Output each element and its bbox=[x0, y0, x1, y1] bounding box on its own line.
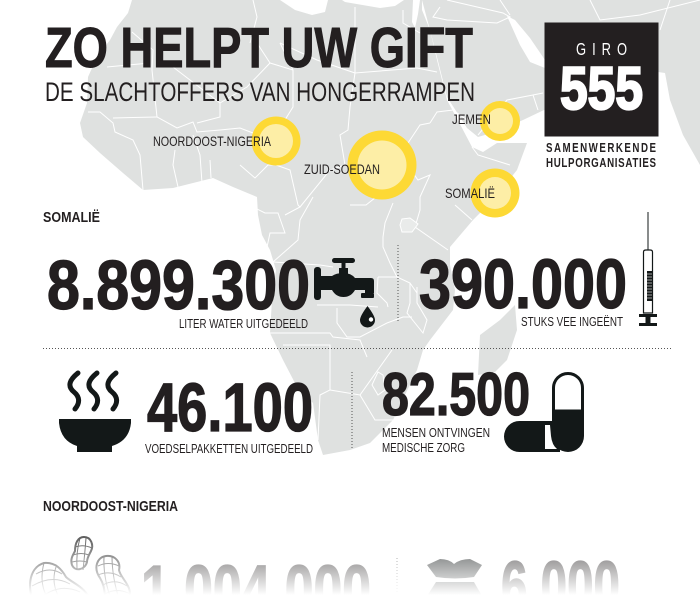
background map of Africa and Arabia bbox=[80, 0, 700, 455]
map marker: Zuid-Soedan: ZUID-SOEDAN bbox=[304, 161, 380, 177]
logo: Giro 555: SAMENWERKENDE bbox=[546, 142, 656, 155]
subtitle: DE SLACHTOFFERS VAN HONGERRAMPEN bbox=[45, 77, 475, 107]
dotted divider bbox=[397, 245, 399, 322]
logo: Giro 555: GIRO bbox=[576, 40, 627, 60]
icon: peanuts bbox=[30, 537, 130, 602]
bottom fade overlay bbox=[0, 515, 700, 595]
stat: medical care bbox=[382, 361, 530, 455]
icon: lips shape bbox=[427, 559, 482, 602]
stat: food packages: 46.100 bbox=[147, 369, 313, 446]
map marker: Somalië bbox=[445, 168, 520, 218]
icon: bowl with steam bbox=[59, 373, 131, 452]
logo: Giro 555 bbox=[544, 22, 658, 170]
stat: medical care: 82.500 bbox=[382, 361, 530, 428]
heading: Somalië: SOMALIË bbox=[43, 209, 100, 226]
map marker: Jemen bbox=[452, 101, 520, 141]
stat: cattle vaccinated: STUKS VEE INGEËNT bbox=[521, 314, 623, 329]
logo: Giro 555: HULPORGANISATIES bbox=[546, 157, 656, 170]
logo: Giro 555: 555 bbox=[560, 55, 643, 122]
stat: food packages: VOEDSELPAKKETTEN UITGEDEELD bbox=[145, 441, 313, 456]
title: ZO HELPT UW GIFT bbox=[45, 16, 473, 80]
dotted divider bbox=[396, 558, 398, 592]
stat: medical care: MENSEN ONTVINGEN bbox=[382, 425, 490, 440]
map marker: Jemen: JEMEN bbox=[452, 111, 491, 127]
map marker: Zuid-Soedan bbox=[304, 130, 416, 200]
icon: water tap with drop bbox=[314, 258, 375, 328]
stat: liters of water: LITER WATER UITGEDEELD bbox=[179, 316, 308, 331]
icon: syringe bbox=[639, 212, 657, 326]
dotted divider bbox=[351, 372, 353, 450]
stat: liters of water: 8.899.300 bbox=[47, 246, 310, 324]
map marker: Noordoost-Nigeria: NOORDOOST-NIGERIA bbox=[153, 133, 272, 149]
stat: medical care: MEDISCHE ZORG bbox=[382, 440, 465, 455]
icon: medicine capsules bbox=[504, 374, 584, 452]
stat: cattle vaccinated: 390.000 bbox=[419, 245, 627, 323]
map marker: Somalië: SOMALIË bbox=[445, 185, 495, 201]
map marker: Noordoost-Nigeria bbox=[153, 116, 300, 166]
dotted divider bbox=[43, 348, 671, 350]
heading: Noordoost-Nigeria: NOORDOOST-NIGERIA bbox=[43, 498, 178, 515]
